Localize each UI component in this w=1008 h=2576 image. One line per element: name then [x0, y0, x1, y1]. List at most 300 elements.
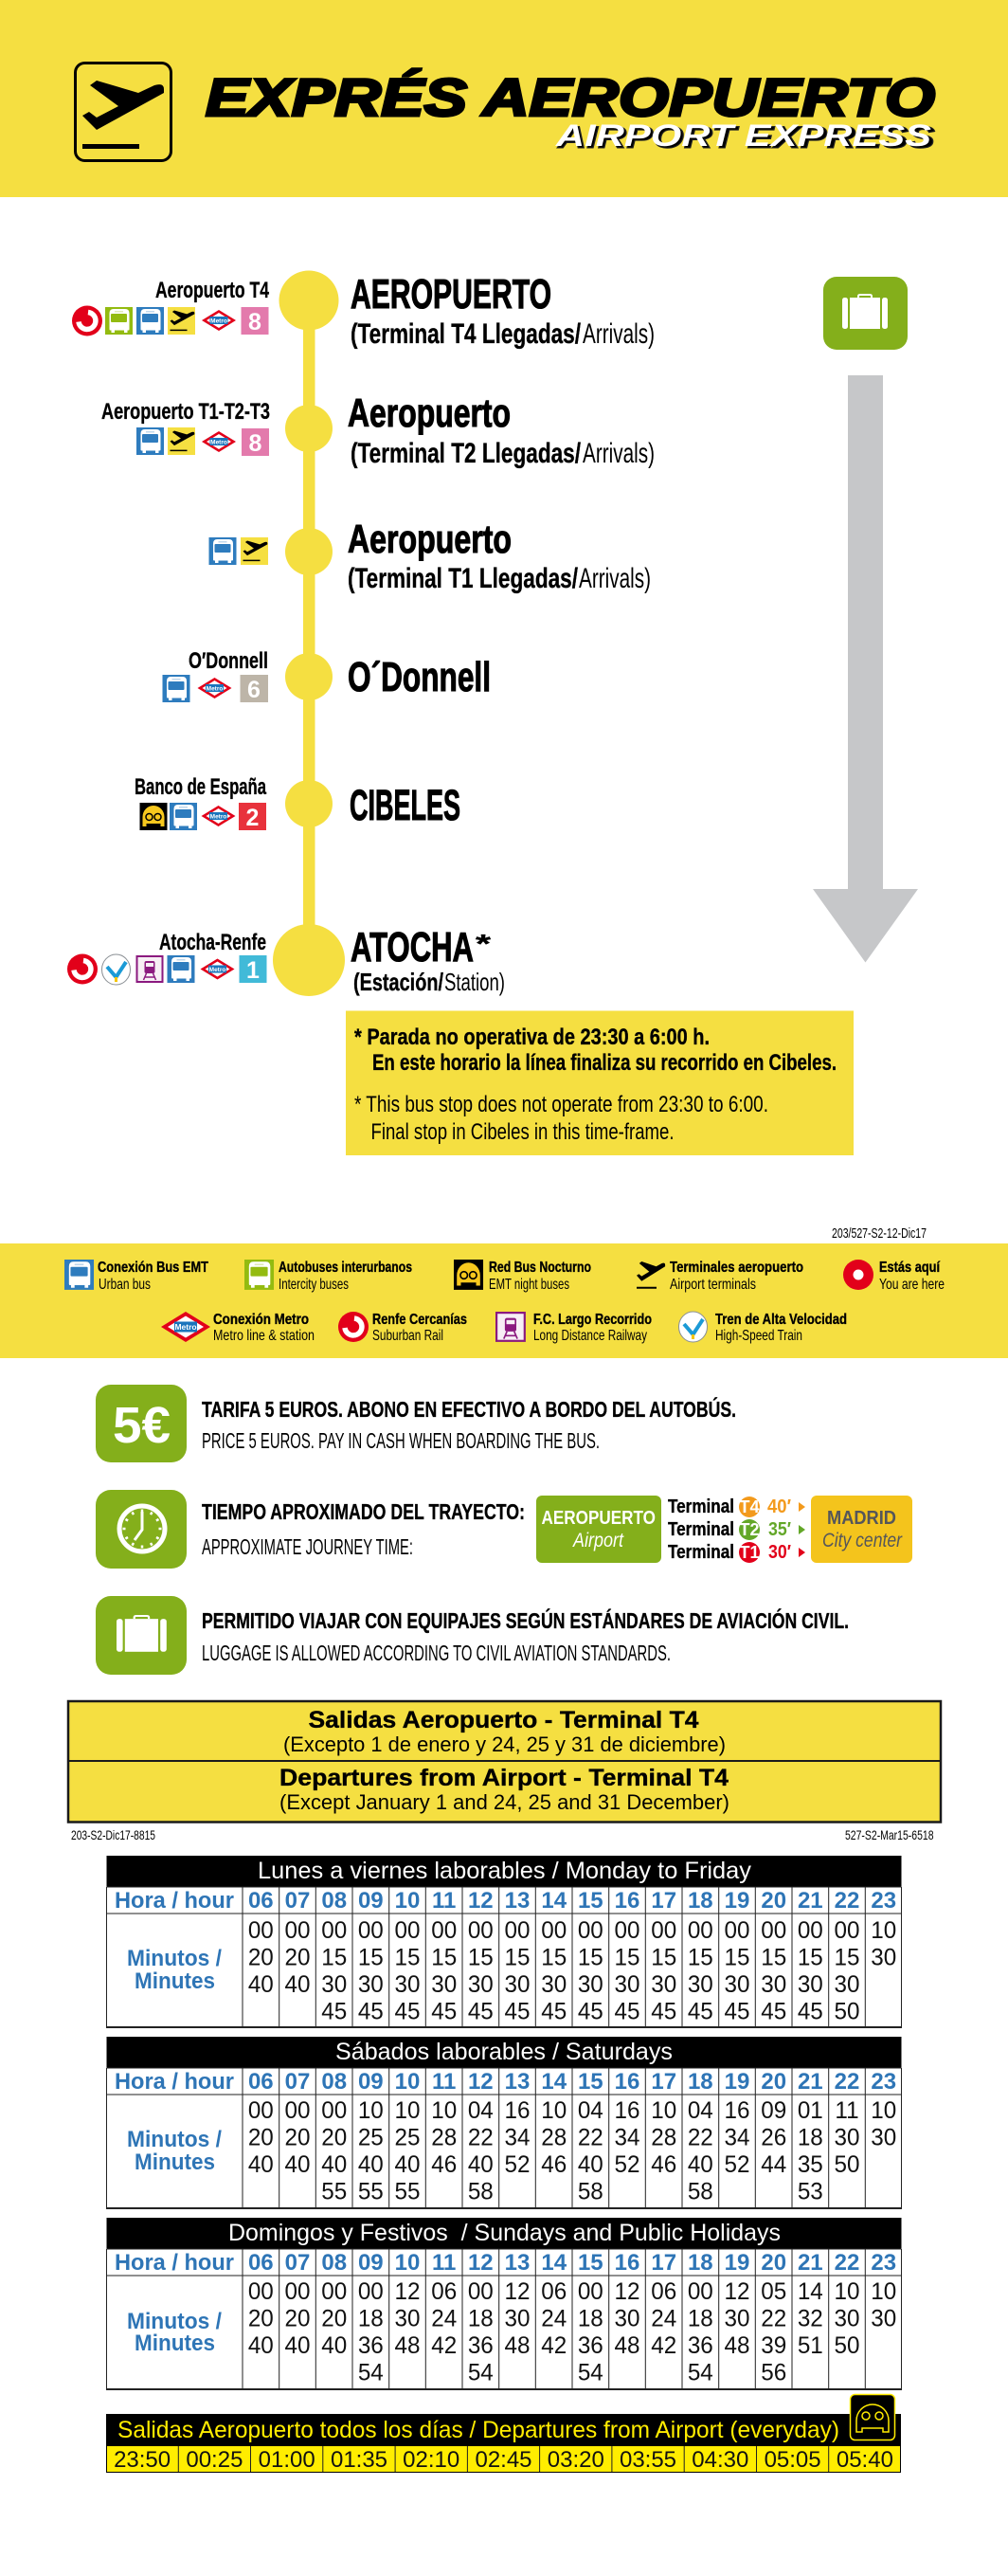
terminal times: T4	[739, 1497, 760, 1516]
minutes values: 32	[798, 2306, 823, 2332]
minutes values: 18	[798, 2125, 823, 2151]
minutes values: 20	[248, 1945, 274, 1971]
stop: Aeropuerto T2: Aeropuerto	[348, 390, 511, 435]
minutes values: 48	[615, 2333, 639, 2359]
minutes values: 34	[615, 2125, 639, 2151]
stop: Cibeles: Banco de España	[135, 774, 266, 800]
minutes values: 00	[321, 2279, 347, 2305]
hour header row: 11	[432, 2250, 456, 2276]
minutes values: 55	[358, 2179, 384, 2205]
minutes values: 00	[358, 1918, 384, 1944]
hour header row: Hora / hour	[115, 1888, 234, 1914]
minutes values: 30	[725, 2306, 749, 2332]
legend: night bus: EMT night buses	[489, 1277, 569, 1293]
minutes values: 10	[871, 1918, 896, 1944]
minutes values: 30	[505, 1972, 530, 1998]
stop: Aeropuerto T2: Arrivals)	[583, 438, 655, 469]
minutes values: 00	[505, 1918, 530, 1944]
minutes values: 10	[871, 2098, 896, 2124]
connection icons: 8	[249, 430, 262, 457]
minutes values: 48	[395, 2333, 420, 2359]
stop: Aeropuerto T2: Aeropuerto T1-T2-T3	[101, 399, 270, 425]
info: journey time: TIEMPO APROXIMADO DEL TRAYECTO:	[202, 1499, 525, 1524]
minutes values: 00	[541, 1918, 567, 1944]
heading: departures banner: (Except January 1 and 24, 25 and 31 December)	[279, 1790, 729, 1814]
minutes values: 30	[395, 2306, 420, 2332]
minutes values: 30	[871, 1945, 896, 1971]
stop: Atocha: *	[476, 929, 491, 958]
minutes values: 58	[578, 2179, 603, 2205]
minutes values: 00	[468, 1918, 494, 1944]
hour header row: 12	[468, 1888, 494, 1914]
minutes values: 00	[248, 2279, 274, 2305]
minutes values: 30	[688, 1972, 713, 1998]
night departure times: 02:45	[475, 2447, 532, 2473]
minutes values: 45	[468, 1999, 494, 2025]
minutes values: 36	[468, 2333, 494, 2359]
minutes values: 18	[468, 2306, 494, 2332]
hour header row: 14	[541, 2250, 567, 2276]
connection icons: 2	[246, 805, 259, 831]
minutes values: 10	[541, 2098, 567, 2124]
hour header row: 23	[871, 2069, 896, 2095]
minutes values: 30	[578, 1972, 603, 1998]
legend: urban bus: Conexión Bus EMT	[98, 1260, 208, 1276]
minutes values: 30	[505, 2306, 530, 2332]
minutes values: 14	[798, 2279, 823, 2305]
stop: O'Donnell: O´Donnell	[348, 654, 491, 700]
minutes values: 46	[651, 2152, 676, 2178]
minutes values: 36	[358, 2333, 384, 2359]
hour header row: 23	[871, 1888, 896, 1914]
hour header row: 21	[798, 2069, 823, 2095]
connection icons: Metro	[210, 813, 226, 820]
minutes values: 00	[395, 1918, 420, 1944]
legend: night bus	[454, 1260, 591, 1293]
minutes values: 20	[248, 2306, 274, 2332]
minutes values: 15	[541, 1945, 567, 1971]
hour header row: 20	[761, 1888, 786, 1914]
table: Sundays and Public Holidays	[106, 2218, 902, 2389]
connection icons	[67, 953, 267, 985]
stop: Atocha: Station)	[444, 968, 505, 996]
terminal times: Terminal	[668, 1519, 734, 1540]
minutes values: 50	[835, 1999, 859, 2025]
info: luggage	[96, 1596, 849, 1675]
minutes values: 00	[578, 2279, 603, 2305]
text: timetable code left: 203-S2-Dic17-8815	[71, 1827, 155, 1842]
terminal times: 40′	[767, 1497, 791, 1517]
hour header row: 17	[651, 2250, 676, 2276]
minutes values: 16	[615, 2098, 639, 2124]
minutes values	[248, 2098, 896, 2205]
hour header row: 06	[248, 2250, 274, 2276]
minutes values: 45	[725, 1999, 749, 2025]
minutes values: 00	[285, 2279, 310, 2305]
minutes values: 58	[468, 2179, 494, 2205]
stop: Atocha: Atocha-Renfe	[159, 930, 266, 955]
legend: you are here: You are here	[879, 1277, 945, 1293]
terminal times: 35′	[768, 1519, 791, 1540]
legend: high-speed train: Tren de Alta Velocidad	[715, 1312, 847, 1328]
hour header row: 08	[321, 2250, 347, 2276]
minutes values: 40	[578, 2152, 603, 2178]
stop: Aeropuerto T1: (Terminal T1 Llegadas/	[348, 563, 578, 594]
stop: Aeropuerto T4	[72, 271, 655, 350]
stop: Aeropuerto T1: Aeropuerto	[348, 517, 512, 561]
minutes label: Minutos /	[127, 2309, 222, 2334]
minutes values: 11	[835, 2098, 859, 2124]
minutes values: 10	[431, 2098, 457, 2124]
minutes values: 16	[505, 2098, 530, 2124]
minutes values: 30	[871, 2125, 896, 2151]
icon: suitcase	[96, 1596, 187, 1675]
minutes values: 54	[578, 2360, 603, 2386]
legend: you are here	[843, 1260, 945, 1293]
minutes values: 30	[615, 2306, 639, 2332]
minutes values: 24	[651, 2306, 676, 2332]
hour header row: 10	[395, 2069, 420, 2095]
legend: airport terminals: Terminales aeropuerto	[670, 1260, 803, 1276]
minutes values: 15	[468, 1945, 494, 1971]
minutes values: 30	[871, 2306, 896, 2332]
panel: airport origin	[536, 1496, 661, 1563]
table: Monday to Friday	[106, 1856, 902, 2027]
minutes values: 30	[651, 1972, 676, 1998]
minutes values: 15	[431, 1945, 457, 1971]
terminal times	[668, 1497, 805, 1563]
stop: Aeropuerto T1: Arrivals)	[579, 563, 651, 594]
minutes values: 45	[505, 1999, 530, 2025]
minutes values: 00	[798, 1918, 823, 1944]
hour header row: 14	[541, 2069, 567, 2095]
table: Saturdays: Sábados laborables / Saturdays	[335, 2039, 673, 2065]
connection icons: Metro	[207, 685, 223, 692]
minutes values: 30	[798, 1972, 823, 1998]
minutes values: 06	[541, 2279, 567, 2305]
heading: departures banner: Salidas Aeropuerto - Terminal T4	[309, 1707, 699, 1733]
minutes values	[248, 1918, 896, 2025]
legend: suburban rail: Renfe Cercanías	[372, 1312, 467, 1328]
hour header row: Hora / hour	[115, 2250, 234, 2276]
hour header row: 16	[615, 1888, 639, 1914]
minutes values: 00	[431, 1918, 457, 1944]
hour header row: 08	[321, 1888, 347, 1914]
minutes values: 10	[358, 2098, 384, 2124]
minutes values: 00	[248, 1918, 274, 1944]
table: night departures every day: Salidas Aeropuerto todos los días / Departures from Airport (everyday)	[117, 2417, 839, 2443]
legend: urban bus: Urban bus	[99, 1277, 151, 1293]
hour header row: 07	[285, 2250, 310, 2276]
minutes values: 00	[248, 2098, 274, 2124]
hour header row: 09	[358, 2250, 384, 2276]
connection icons: 6	[247, 677, 261, 703]
minutes values: 40	[248, 1972, 274, 1998]
minutes label	[127, 2309, 222, 2356]
minutes values: 25	[358, 2125, 384, 2151]
minutes values: 10	[395, 2098, 420, 2124]
table: night departures every day	[106, 2394, 901, 2473]
minutes values: 00	[321, 1918, 347, 1944]
hour header row: 15	[578, 1888, 603, 1914]
info: journey time: APPROXIMATE JOURNEY TIME:	[202, 1534, 413, 1559]
minutes values: 53	[798, 2179, 823, 2205]
minutes label: Minutos /	[127, 2127, 222, 2152]
hour header row: 12	[468, 2250, 494, 2276]
minutes values: 15	[835, 1945, 859, 1971]
minutes values: 54	[358, 2360, 384, 2386]
header band	[0, 0, 1008, 197]
hour header row: 19	[725, 1888, 749, 1914]
hour header row: 22	[835, 1888, 859, 1914]
legend: long distance railway: Long Distance Railway	[533, 1328, 647, 1344]
panel: Madrid destination: City center	[822, 1530, 903, 1551]
hour header row: 18	[688, 2250, 713, 2276]
minutes values: 40	[285, 1972, 310, 1998]
hour header row: 13	[505, 2069, 530, 2095]
minutes values: 18	[578, 2306, 603, 2332]
minutes values: 06	[431, 2279, 457, 2305]
icon: night bus	[851, 2394, 894, 2440]
minutes values: 30	[431, 1972, 457, 1998]
stop: O'Donnell	[163, 648, 491, 703]
terminal times: T1	[739, 1543, 760, 1562]
legend: urban bus	[64, 1260, 208, 1293]
hour header row: 09	[358, 2069, 384, 2095]
legend: long distance railway: F.C. Largo Recorrido	[533, 1312, 652, 1328]
callout: Atocha stop note	[346, 1010, 854, 1155]
legend: metro	[161, 1312, 315, 1344]
callout: Atocha stop note: En este horario la línea finaliza su recorrido en Cibeles.	[372, 1050, 837, 1076]
minutes values: 00	[285, 2098, 310, 2124]
stop: Cibeles: CIBELES	[350, 781, 460, 829]
minutes values: 12	[505, 2279, 530, 2305]
minutes values: 30	[395, 1972, 420, 1998]
info: price	[96, 1385, 736, 1462]
minutes values: 20	[285, 1945, 310, 1971]
hour header row: 12	[468, 2069, 494, 2095]
minutes values: 00	[761, 1918, 786, 1944]
hour header row: 06	[248, 2069, 274, 2095]
minutes values: 20	[321, 2125, 347, 2151]
stop: Aeropuerto T4: (Terminal T4 Llegadas/	[351, 318, 581, 350]
minutes values: 15	[505, 1945, 530, 1971]
callout: Atocha stop note: Final stop in Cibeles in this time-frame.	[371, 1119, 675, 1145]
hour header row: 15	[578, 2069, 603, 2095]
minutes values: 40	[395, 2152, 420, 2178]
minutes values: 15	[761, 1945, 786, 1971]
minutes values: 45	[541, 1999, 567, 2025]
minutes values: 00	[578, 1918, 603, 1944]
minutes values: 30	[835, 1972, 859, 1998]
minutes values: 40	[285, 2152, 310, 2178]
hour header row: 16	[615, 2069, 639, 2095]
minutes values: 48	[725, 2333, 749, 2359]
minutes values: 20	[248, 2125, 274, 2151]
minutes values: 15	[395, 1945, 420, 1971]
minutes values: 54	[688, 2360, 713, 2386]
minutes values: 20	[321, 2306, 347, 2332]
info: price: PRICE 5 EUROS. PAY IN CASH WHEN BOARDING THE BUS.	[202, 1428, 600, 1453]
minutes values: 45	[578, 1999, 603, 2025]
minutes values: 00	[468, 2279, 494, 2305]
hour header row: 15	[578, 2250, 603, 2276]
heading: departures banner: Departures from Airport - Terminal T4	[279, 1765, 729, 1791]
hour header row: 19	[725, 2250, 749, 2276]
minutes values: 15	[725, 1945, 749, 1971]
stop: Atocha: ATOCHA	[351, 924, 474, 971]
legend: intercity bus: Autobuses interurbanos	[279, 1260, 412, 1276]
hour header row: 17	[651, 1888, 676, 1914]
route line with stops	[273, 271, 345, 996]
minutes label: Minutos /	[127, 1946, 222, 1971]
minutes values: 28	[651, 2125, 676, 2151]
minutes values: 30	[835, 2306, 859, 2332]
night departure times: 03:20	[548, 2447, 604, 2473]
connection icons: Metro	[209, 967, 225, 973]
minutes values: 15	[358, 1945, 384, 1971]
minutes values: 40	[688, 2152, 713, 2178]
hour header row	[115, 2250, 896, 2276]
minutes values: 36	[578, 2333, 603, 2359]
hour header row: 20	[761, 2069, 786, 2095]
minutes values: 45	[395, 1999, 420, 2025]
info: luggage: LUGGAGE IS ALLOWED ACCORDING TO CIVIL AVIATION STANDARDS.	[202, 1641, 671, 1665]
minutes values: 00	[651, 1918, 676, 1944]
hour header row: 09	[358, 1888, 384, 1914]
hour header row: 18	[688, 1888, 713, 1914]
table: Sundays and Public Holidays: Domingos y Festivos / Sundays and Public Holidays	[228, 2220, 781, 2246]
hour header row: 21	[798, 1888, 823, 1914]
hour header row: 22	[835, 2069, 859, 2095]
minutes values: 15	[688, 1945, 713, 1971]
night departure times: 23:50	[114, 2447, 171, 2473]
connection icons: 8	[248, 309, 261, 336]
minutes values: 34	[505, 2125, 530, 2151]
legend: long distance railway	[496, 1312, 652, 1344]
hour header row: 16	[615, 2250, 639, 2276]
text: timetable code right: 527-S2-Mar15-6518	[845, 1827, 934, 1842]
table: Monday to Friday: Lunes a viernes laborables / Monday to Friday	[258, 1858, 752, 1884]
night departure times: 01:35	[331, 2447, 387, 2473]
icon: 5 euros: 5€	[113, 1397, 171, 1454]
connection icons	[136, 427, 269, 457]
minutes label: Minutes	[135, 2150, 215, 2175]
panel: airport origin: Airport	[571, 1530, 624, 1551]
minutes values: 44	[761, 2152, 786, 2178]
minutes values: 10	[651, 2098, 676, 2124]
stop: O'Donnell: O′Donnell	[189, 648, 268, 674]
hour header row: 22	[835, 2250, 859, 2276]
minutes values: 18	[358, 2306, 384, 2332]
connection icons	[140, 803, 266, 831]
minutes values: 04	[688, 2098, 713, 2124]
hour header row: 11	[432, 2069, 456, 2095]
minutes values: 04	[578, 2098, 603, 2124]
hour header row	[115, 2069, 896, 2095]
minutes values: 52	[505, 2152, 530, 2178]
minutes values: 39	[761, 2333, 786, 2359]
minutes values: 12	[395, 2279, 420, 2305]
minutes values: 48	[505, 2333, 530, 2359]
minutes values: 01	[798, 2098, 823, 2124]
minutes values: 35	[798, 2152, 823, 2178]
night departure times: 02:10	[403, 2447, 459, 2473]
minutes values: 25	[395, 2125, 420, 2151]
minutes values: 58	[688, 2179, 713, 2205]
legend: airport terminals: Airport terminals	[670, 1277, 756, 1293]
hour header row: 06	[248, 1888, 274, 1914]
legend: intercity bus	[244, 1260, 412, 1293]
legend: you are here: Estás aquí	[879, 1260, 940, 1276]
minutes values: 00	[285, 1918, 310, 1944]
subtitle: Airport Express: AIRPORT EXPRESS	[557, 120, 936, 154]
minutes values: 18	[688, 2306, 713, 2332]
legend: high-speed train: High-Speed Train	[715, 1328, 802, 1344]
minutes values: 45	[651, 1999, 676, 2025]
stop: Aeropuerto T1	[208, 517, 651, 594]
minutes values: 20	[285, 2125, 310, 2151]
minutes values: 20	[285, 2306, 310, 2332]
minutes values: 09	[761, 2098, 786, 2124]
legend: metro: Metro	[174, 1322, 197, 1332]
hour header row: 19	[725, 2069, 749, 2095]
minutes values: 16	[725, 2098, 749, 2124]
minutes values: 54	[468, 2360, 494, 2386]
minutes values: 22	[468, 2125, 494, 2151]
minutes values: 40	[248, 2152, 274, 2178]
arrow: travel direction	[813, 375, 918, 963]
hour header row: 07	[285, 1888, 310, 1914]
night departure times: 00:25	[186, 2447, 243, 2473]
minutes values: 36	[688, 2333, 713, 2359]
minutes values: 15	[615, 1945, 639, 1971]
terminal times: Terminal	[668, 1497, 734, 1517]
minutes values: 00	[615, 1918, 639, 1944]
minutes values: 40	[321, 2152, 347, 2178]
panel: airport origin: AEROPUERTO	[542, 1508, 656, 1529]
hour header row: 11	[432, 1888, 456, 1914]
stop: Aeropuerto T4: AEROPUERTO	[351, 271, 551, 317]
connection icons: Metro	[210, 439, 227, 445]
minutes values: 50	[835, 2333, 859, 2359]
minutes values: 15	[321, 1945, 347, 1971]
minutes values: 00	[835, 1918, 859, 1944]
minutes values: 30	[725, 1972, 749, 1998]
hour header row	[115, 1888, 896, 1914]
icon: clock	[96, 1490, 187, 1569]
hour header row: 10	[395, 1888, 420, 1914]
hour header row: 13	[505, 2250, 530, 2276]
table: Saturdays	[106, 2037, 902, 2208]
connection icons: Metro	[210, 317, 227, 324]
minutes values: 45	[761, 1999, 786, 2025]
minutes values: 28	[541, 2125, 567, 2151]
stop: Atocha	[67, 924, 505, 996]
legend: suburban rail: Suburban Rail	[372, 1328, 443, 1344]
title: Exprés Aeropuerto: EXPRÉS AEROPUERTO	[206, 67, 935, 127]
legend: intercity bus: Intercity buses	[279, 1277, 349, 1293]
minutes values: 46	[541, 2152, 567, 2178]
icon: 5 euros	[96, 1385, 187, 1462]
night departure times: 04:30	[692, 2447, 748, 2473]
minutes label	[127, 1946, 222, 1994]
hour header row: 17	[651, 2069, 676, 2095]
minutes values: 30	[615, 1972, 639, 1998]
minutes values: 24	[541, 2306, 567, 2332]
minutes values: 45	[321, 1999, 347, 2025]
minutes values: 28	[431, 2125, 457, 2151]
